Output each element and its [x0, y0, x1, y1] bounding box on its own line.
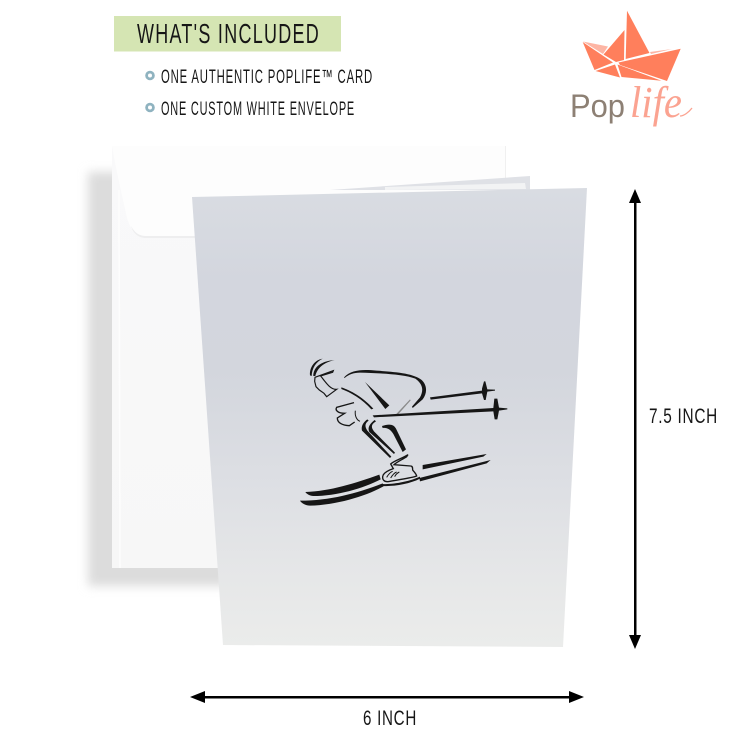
- item: one custom white envelope: ONE CUSTOM WHITE ENVELOPE: [161, 99, 355, 120]
- label: width: 6 INCH: [363, 707, 417, 730]
- back: [344, 370, 426, 408]
- item: one authentic poplife card: ONE AUTHENTIC POPLIFE™ CARD: [161, 67, 373, 88]
- skis: [423, 454, 487, 469]
- heading: what's included: WHAT'S INCLUDED: [137, 18, 320, 49]
- list: included items: [147, 67, 373, 120]
- logo wordmark: Pop: [570, 88, 625, 124]
- flap shadow: [131, 226, 200, 238]
- far pole: [430, 381, 495, 400]
- logo wordmark: [570, 78, 692, 127]
- face: [315, 371, 337, 397]
- torso line: [365, 382, 389, 409]
- arrow: height dimension: [629, 189, 641, 649]
- card back leaf: [330, 176, 530, 190]
- logo wordmark: life: [630, 78, 682, 127]
- logo: poplife: [570, 11, 692, 127]
- boot: [383, 455, 417, 482]
- envelope shadow: [88, 172, 228, 586]
- hands: [336, 403, 355, 426]
- card front: [192, 188, 587, 647]
- helmet: [310, 359, 323, 376]
- item: one custom white envelope: [147, 99, 355, 120]
- illustration: skier: [300, 359, 507, 506]
- envelope body: [112, 146, 505, 568]
- heading: what's included: [114, 16, 341, 52]
- greeting card: [192, 176, 587, 647]
- item: one authentic poplife card: [147, 67, 373, 88]
- icon: origami boat: [583, 11, 681, 81]
- legs: [362, 419, 391, 458]
- envelope flap: [112, 146, 505, 236]
- envelope: [88, 146, 506, 586]
- near pole: [373, 399, 507, 419]
- arrow: width dimension: [190, 691, 584, 703]
